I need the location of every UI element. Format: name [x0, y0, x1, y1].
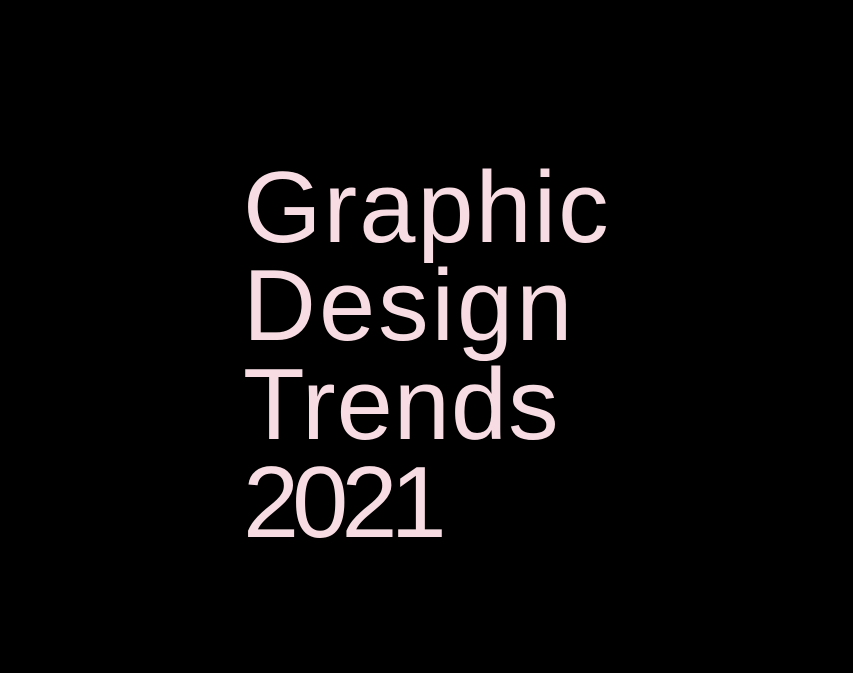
title line: Trends: Trends	[243, 349, 560, 461]
title line: 2021: 2021	[243, 447, 440, 559]
title line: Graphic: Graphic	[243, 152, 611, 264]
title line: Design: Design	[243, 250, 575, 362]
